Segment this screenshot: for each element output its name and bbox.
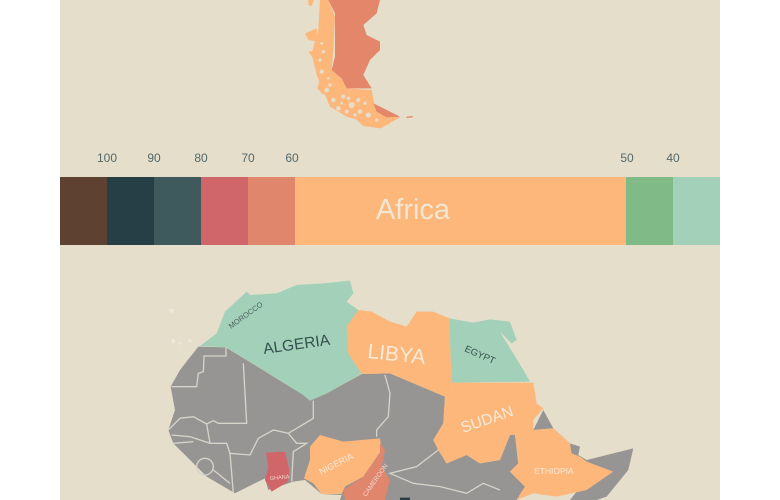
country: Libya [347, 310, 452, 397]
country: Egypt [449, 318, 530, 383]
country labels: EGYPT [463, 344, 497, 367]
country: Algeria and Morocco [200, 281, 362, 401]
borders [168, 347, 500, 493]
country: Cameroon [343, 443, 390, 500]
axis labels: 100 [97, 151, 117, 165]
country labels: ETHIOPIA [534, 466, 574, 476]
country labels: MOROCCO [227, 300, 265, 331]
region: grey countries [168, 347, 525, 500]
axis labels: 90 [147, 151, 161, 165]
country: Nigeria [304, 435, 382, 494]
country labels: NIGERIA [317, 451, 355, 477]
country: Sudan [433, 383, 543, 463]
map: northern Africa [168, 281, 633, 500]
country: Ethiopia [510, 428, 613, 500]
country labels: CAMEROON [362, 463, 390, 498]
country: Ghana [265, 452, 289, 492]
axis labels: 50 [620, 151, 634, 165]
country labels: SUDAN [459, 403, 516, 437]
region: Horn of Africa grey [533, 410, 633, 500]
country labels [227, 300, 574, 498]
heading: Africa: Africa [376, 194, 451, 226]
country labels: ALGERIA [262, 332, 332, 358]
axis labels: 70 [241, 151, 255, 165]
islands [169, 308, 192, 345]
country labels: GHANA [270, 474, 290, 482]
small dark country at the crop edge [400, 498, 410, 500]
colour scale bar [60, 177, 720, 245]
map: southern tip of South America [305, 0, 413, 128]
axis labels: 60 [285, 151, 299, 165]
axis labels: 40 [666, 151, 680, 165]
country labels: LIBYA [366, 340, 427, 369]
axis labels [97, 151, 680, 165]
axis labels: 80 [194, 151, 208, 165]
